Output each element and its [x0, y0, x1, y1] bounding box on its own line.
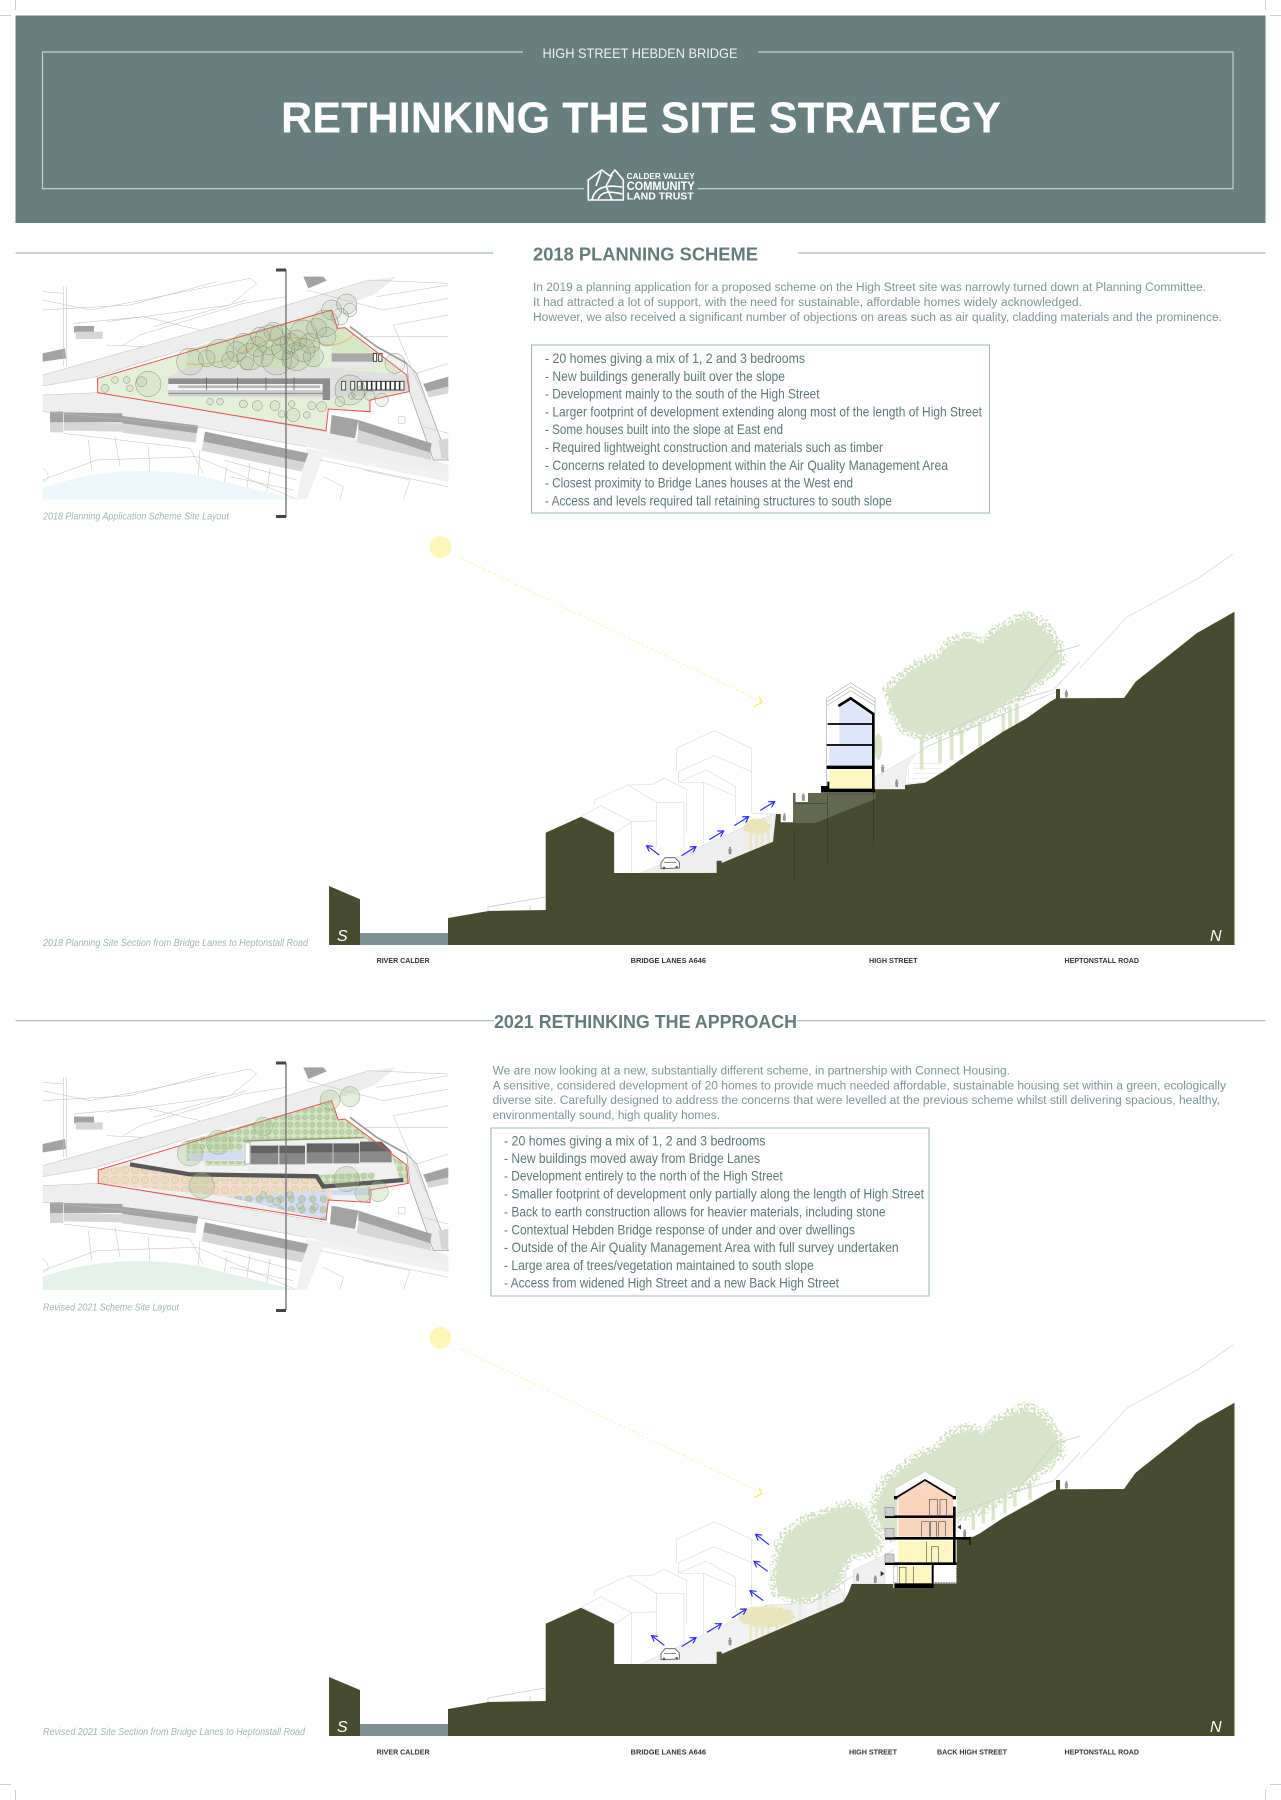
labels: 2018 section: RIVER CALDER [377, 958, 430, 965]
compass letters: S [337, 928, 348, 945]
panel: 2018 key points list: - Development mainly to the south of the High Street [545, 386, 820, 402]
section cut line: 2021 map [276, 1062, 286, 1312]
panel: 2018 key points list: - Closest proximity to Bridge Lanes houses at the West end [545, 474, 853, 490]
panel: 2018 key points list: - New buildings generally built over the slope [545, 368, 785, 384]
text block: 2021 intro: environmentally sound, high quality homes. [493, 1110, 720, 1122]
panel: 2021 key points list: - Large area of trees/vegetation maintained to south slope [504, 1257, 814, 1273]
labels: 2018 section [377, 958, 1139, 965]
road and neighbouring houses [582, 690, 1068, 873]
text block: 2018 intro: In 2019 a planning application for a proposed scheme on the High Street site was narrowly turned down at Planning Committee. [533, 282, 1206, 294]
river [43, 1261, 297, 1290]
labels: 2021 section: BRIDGE LANES A646 [631, 1750, 706, 1756]
compass letters: N [1210, 1719, 1222, 1736]
caption: 2018 site layout: 2018 Planning Application Scheme Site Layout [42, 512, 230, 522]
chart: 2021 site section [329, 1327, 1234, 1736]
trees [874, 610, 1067, 770]
river [360, 933, 448, 945]
icon: sun [430, 536, 452, 558]
heading: 2018 planning scheme: 2018 PLANNING SCHEME [533, 244, 758, 264]
faint hillside lines [810, 1436, 1080, 1603]
heading: 2021 rethinking the approach: 2021 RETHINKING THE APPROACH [494, 1012, 797, 1032]
labels: 2018 section: HIGH STREET [869, 958, 918, 965]
trees [177, 1087, 388, 1210]
map: 2018 site layout [43, 277, 448, 499]
panel: 2018 key points list: - Access and levels required tall retaining structures to south slope [545, 492, 892, 508]
panel: 2018 key points list: - Some houses built into the slope at East end [545, 421, 783, 437]
compass letters: S [337, 1719, 348, 1736]
logo: Calder Valley Community Land Trust: COMMUNITY [627, 181, 695, 193]
compass letters [337, 1719, 1222, 1736]
heading: site name: HIGH STREET HEBDEN BRIDGE [542, 45, 738, 61]
building section: 2018 house [794, 683, 875, 880]
arrows: blue view lines [647, 802, 775, 856]
text block: 2018 intro: It had attracted a lot of support, with the need for sustainable, affordable homes widely acknowledged. [533, 297, 1082, 309]
labels: 2021 section: RIVER CALDER [377, 1750, 430, 1756]
houses [245, 1142, 392, 1164]
title: RETHINKING THE SITE STRATEGY [281, 94, 1001, 142]
building section: 2021 house [885, 1472, 970, 1588]
panel: 2021 key points list: - Back to earth construction allows for heavier materials, including stone [504, 1203, 886, 1219]
icon: sun [430, 1327, 452, 1349]
panel: 2021 key points list: - 20 homes giving a mix of 1, 2 and 3 bedrooms [504, 1132, 766, 1148]
panel: 2018 key points list: - Larger footprint of development extending along most of the length of High Street [545, 404, 982, 420]
labels: 2021 section: HIGH STREET [849, 1750, 898, 1756]
road and neighbouring houses [582, 1481, 1068, 1664]
logo: Calder Valley Community Land Trust: CALDER VALLEY [627, 172, 695, 181]
trees [768, 1401, 1067, 1620]
text block: 2018 intro [533, 282, 1222, 324]
undercroft fill [793, 793, 876, 822]
labels: 2018 section: BRIDGE LANES A646 [631, 958, 706, 965]
site boundary [98, 310, 409, 431]
panel: 2021 key points list [491, 1128, 929, 1296]
logo: Calder Valley Community Land Trust: LAND TRUST [627, 190, 694, 202]
compass letters: N [1210, 928, 1222, 945]
text block: 2021 intro [493, 1066, 1226, 1122]
labels: 2018 section: HEPTONSTALL ROAD [1064, 958, 1139, 965]
map: 2021 site layout [43, 1067, 448, 1290]
panel: 2021 key points list: - New buildings moved away from Bridge Lanes [504, 1150, 760, 1166]
panel: 2021 key points list: - Contextual Hebden Bridge response of under and over dwellings [504, 1221, 855, 1237]
text block: 2021 intro: We are now looking at a new, substantially different scheme, in partnership with Connect Housing. [493, 1066, 1010, 1078]
panel: 2021 key points list: - Access from widened High Street and a new Back High Street [504, 1275, 839, 1291]
text block: 2018 intro: However, we also received a significant number of objections on areas such as air quality, cladding materials and the prominence. [533, 312, 1222, 324]
river [360, 1724, 448, 1736]
labels: 2021 section: BACK HIGH STREET [937, 1750, 1008, 1756]
panel: 2018 key points list: - Concerns related to development within the Air Quality Management Area [545, 457, 948, 473]
compass letters [337, 928, 1222, 945]
arrow: sun ray [461, 558, 762, 706]
chart: 2018 site section [329, 536, 1234, 945]
panel: 2021 key points list: - Outside of the Air Quality Management Area with full survey undertaken [504, 1239, 899, 1255]
panel: 2021 key points list: - Smaller footprint of development only partially along the length of High Street [504, 1186, 924, 1202]
caption: 2018 section: 2018 Planning Site Section from Bridge Lanes to Heptonstall Road [42, 938, 308, 949]
text block: 2021 intro: diverse site. Carefully designed to address the concerns that were levelled at the previous scheme whilst still delivering spacious, healthy, [493, 1095, 1220, 1107]
site boundary [98, 1101, 408, 1220]
panel: header banner [16, 16, 1266, 223]
section cut line: 2018 map [276, 268, 286, 518]
faint hillside lines [918, 645, 1080, 753]
arrow: sun ray [461, 1349, 762, 1498]
panel: 2018 key points list: - 20 homes giving a mix of 1, 2 and 3 bedrooms [545, 350, 805, 366]
arrows: blue view lines [652, 1534, 769, 1647]
ground: 2018 terrain [329, 612, 1234, 945]
labels: 2021 section: HEPTONSTALL ROAD [1064, 1750, 1139, 1756]
labels: 2021 section [377, 1750, 1139, 1756]
caption: 2021 site layout: Revised 2021 Scheme Site Layout [43, 1302, 180, 1314]
logo: Calder Valley Community Land Trust [588, 170, 695, 202]
panel: 2018 key points list: - Required lightweight construction and materials such as timber [545, 439, 883, 455]
caption: 2021 section: Revised 2021 Site Section from Bridge Lanes to Heptonstall Road [43, 1727, 305, 1738]
text block: 2021 intro: A sensitive, considered development of 20 homes to provide much needed affordable, sustainable housing set within a green, ecologically [493, 1080, 1226, 1092]
trees [101, 294, 405, 422]
panel: 2021 key points list: - Development entirely to the north of the High Street [504, 1168, 783, 1184]
ground: 2021 terrain [329, 1403, 1234, 1736]
panel: 2018 key points list [532, 345, 990, 513]
site boundary line [98, 310, 409, 431]
river [43, 471, 297, 499]
